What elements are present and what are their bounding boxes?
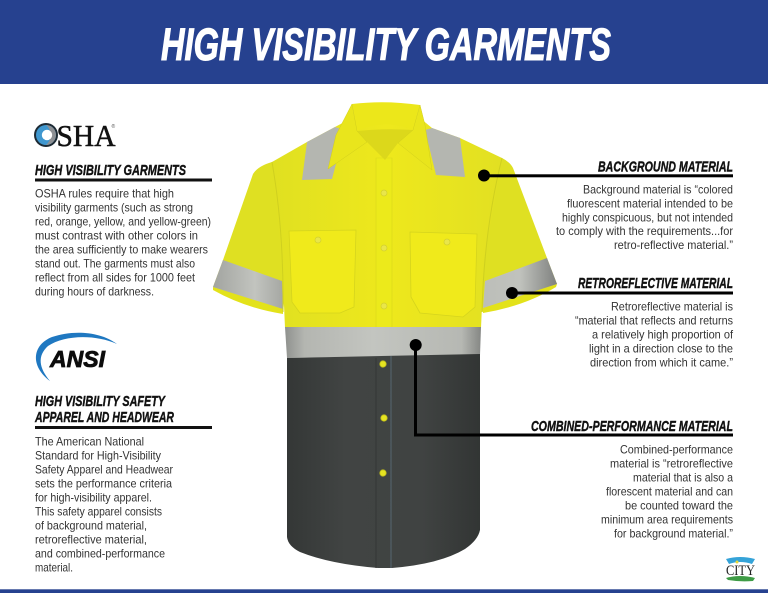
text block: combined-performance material (601, 443, 734, 540)
placket (376, 158, 392, 328)
text block: OSHA rules: stand out. The garments must also (35, 257, 195, 270)
text block: retroreflective material: direction from which it came.” (590, 356, 733, 369)
text block: ANSI standard: retroreflective material, (35, 534, 147, 547)
text block: OSHA rules: OSHA rules require that high (35, 187, 174, 200)
right sleeve (476, 158, 557, 312)
text block: retroreflective material: a relatively high proportion of (592, 328, 734, 341)
text block: OSHA rules: visibility garments (such as strong (35, 201, 193, 214)
callout: combined-performance material (410, 339, 734, 540)
text block: OSHA rules: red, orange, yellow, and yellow-green) (35, 215, 211, 228)
title: HIGH VISIBILITY GARMENTS (161, 19, 611, 70)
pointer line and dot (410, 339, 733, 435)
text block: ANSI standard: material. (35, 562, 73, 575)
heading: safety apparel (34, 393, 174, 426)
icon: OSHA logo: ® (112, 123, 116, 130)
text block: ANSI standard: Safety Apparel and Headwear (35, 464, 173, 477)
shoulder reflective strips (302, 127, 345, 180)
text block: combined-performance material: material that is also a (633, 471, 734, 484)
heading: high visibility garments: HIGH VISIBILITY GARMENTS (35, 162, 186, 179)
text block: combined-performance material: minimum area requirements (601, 513, 733, 526)
text block: OSHA rules: reflect from all sides for 1000 feet (35, 271, 196, 284)
text block: combined-performance material: Combined-performance (620, 443, 733, 456)
text block: retroreflective material: Retroreflective material is (611, 300, 733, 313)
text block: combined-performance material: florescent material and can (606, 485, 733, 498)
pointer line and dot (478, 170, 733, 182)
text block: combined-performance material: for background material.” (614, 527, 733, 540)
text block: ANSI standard: The American National (35, 436, 144, 449)
panel: OSHA (34, 118, 212, 298)
text block: OSHA rules: must contrast with other colors in (35, 229, 198, 242)
dark lower body (287, 354, 480, 568)
icon: City logo: CITY (726, 563, 755, 579)
text block: OSHA rules: the area sufficiently to make wearers (35, 243, 208, 256)
pockets (289, 230, 356, 313)
panel: ANSI (34, 333, 212, 575)
text block: ANSI standard: and combined-performance (35, 548, 165, 561)
heading: safety apparel: APPAREL AND HEADWEAR (34, 409, 174, 426)
callout: background material (478, 158, 733, 252)
text block: ANSI standard: sets the performance criteria (35, 478, 173, 491)
text block: OSHA rules: during hours of darkness. (35, 285, 154, 298)
text block: background material: Background material is “colored (583, 184, 733, 196)
text block: retroreflective material: light in a direction close to the (589, 342, 733, 355)
text block: combined-performance material: be counted toward the (625, 499, 733, 512)
text block: background material: retro-reflective material.” (614, 239, 733, 252)
text block: ANSI standard: of background material, (35, 520, 147, 533)
left sleeve (213, 162, 290, 312)
icon: OSHA logo: SHA (56, 118, 116, 153)
icon: ANSI logo: ANSI (49, 346, 106, 372)
footer bar (0, 589, 768, 593)
shirt illustration (213, 102, 557, 568)
text block: retroreflective material: “material that reflects and returns (575, 314, 733, 327)
text block: ANSI standard: This safety apparel consists (35, 506, 162, 519)
text block: background material: fluorescent material intended to be (567, 198, 733, 210)
icon: ANSI logo (36, 333, 117, 381)
header banner (0, 0, 768, 84)
text block: background material: to comply with the requirements...for (556, 225, 733, 238)
pointer line and dot (506, 287, 733, 299)
text block: ANSI standard: Standard for High-Visibility (35, 450, 161, 463)
yellow body (272, 118, 502, 328)
yellow buttons (315, 190, 450, 309)
reflective waist band (285, 327, 481, 358)
dark placket buttons (380, 361, 387, 476)
collar (328, 102, 432, 170)
text block: OSHA rules (35, 187, 211, 298)
text block: ANSI standard (35, 436, 173, 575)
callout: retroreflective material (506, 275, 734, 369)
text block: ANSI standard: for high-visibility apparel. (35, 492, 152, 505)
text block: retroreflective material (575, 300, 734, 369)
icon: City logo (726, 557, 755, 581)
heading: safety apparel: HIGH VISIBILITY SAFETY (35, 393, 166, 410)
text block: background material: highly conspicuous, but not intended (562, 211, 733, 224)
text block: background material (556, 184, 733, 252)
text block: combined-performance material: material is “retroreflective (610, 457, 733, 470)
